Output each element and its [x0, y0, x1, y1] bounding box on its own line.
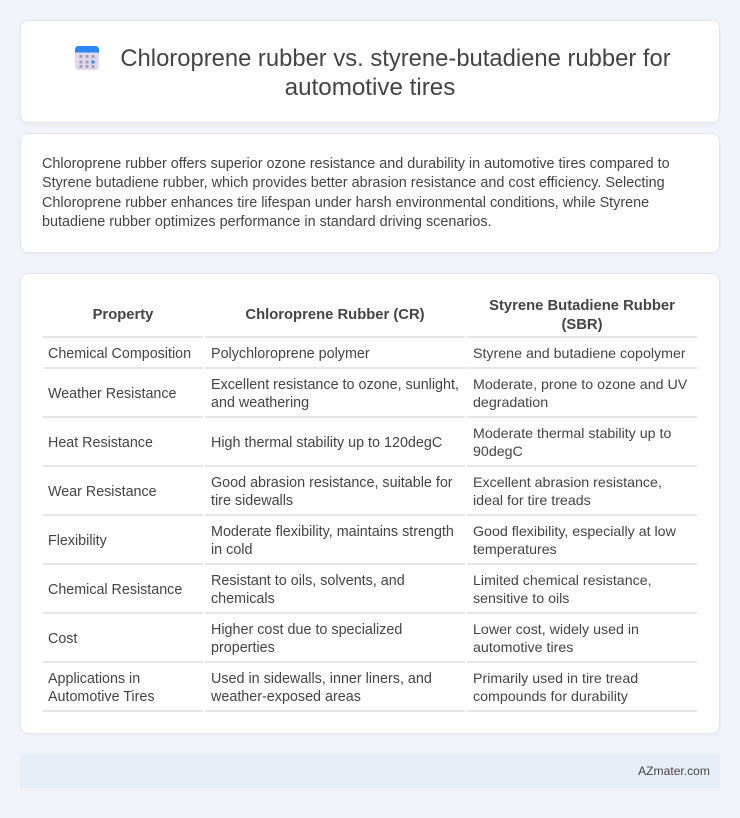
row: wear resistance: tire sidewalls [211, 493, 293, 509]
panel: comparison table [20, 273, 720, 734]
row: cost: Higher cost due to specialized [211, 622, 402, 638]
row: weather resistance: and weathering [211, 395, 309, 411]
row: cost: Lower cost, widely used in [473, 622, 639, 638]
row: heat resistance: Heat Resistance [48, 435, 153, 451]
row: flexibility: Good flexibility, especially at low [473, 524, 676, 540]
row: chemical composition: Polychloroprene polymer [211, 346, 370, 362]
row: wear resistance: Excellent abrasion resistance, [473, 475, 662, 491]
row: applications: Automotive Tires [48, 689, 154, 705]
row: weather resistance: Moderate, prone to ozone and UV [473, 377, 687, 393]
row: heat resistance: 90degC [473, 444, 523, 460]
summary text: Chloroprene rubber offers superior ozone resistance and durability in automotive tires compared to [42, 156, 670, 172]
row: cost: automotive tires [473, 640, 573, 656]
row: flexibility [48, 524, 676, 558]
panel: title card [20, 20, 720, 123]
footer credit: AZmater.com [638, 764, 710, 778]
title [120, 45, 671, 101]
row: wear resistance: ideal for tire treads [473, 493, 591, 509]
row: wear resistance: Good abrasion resistance, suitable for [211, 475, 453, 491]
row: applications: Primarily used in tire tread [473, 671, 638, 687]
row: cost: Cost [48, 631, 77, 647]
row: flexibility: temperatures [473, 542, 557, 558]
row: weather resistance: degradation [473, 395, 548, 411]
row: chemical composition: Styrene and butadiene copolymer [473, 346, 686, 362]
row: chemical composition: Chemical Composition [48, 346, 191, 362]
summary text: butadiene rubber optimizes performance in standard driving scenarios. [42, 214, 492, 230]
panel: summary [20, 133, 720, 253]
summary text: Chloroprene rubber enhances tire lifespan under harsh environmental conditions, while Styrene [42, 195, 649, 211]
table header: Chloroprene Rubber (CR) [245, 307, 425, 323]
row: chemical resistance: Resistant to oils, solvents, and [211, 573, 405, 589]
table header: (SBR) [561, 317, 603, 333]
row: weather resistance: Weather Resistance [48, 386, 176, 402]
table header: Styrene Butadiene Rubber [489, 298, 675, 314]
row: applications: Applications in [48, 671, 140, 687]
summary text: Styrene butadiene rubber, which provides better abrasion resistance and cost efficiency. Selecting [42, 175, 665, 191]
row: wear resistance [48, 475, 662, 509]
footer bar [20, 754, 720, 788]
row: flexibility: in cold [211, 542, 252, 558]
row: heat resistance: High thermal stability up to 120degC [211, 435, 442, 451]
summary text [42, 156, 670, 230]
row: weather resistance [48, 377, 688, 411]
row: cost [48, 622, 639, 656]
row: chemical composition [48, 346, 686, 362]
row: applications: weather-exposed areas [211, 689, 361, 705]
table header [93, 298, 675, 333]
row: chemical resistance [48, 573, 652, 607]
title: automotive tires [285, 74, 455, 101]
row: heat resistance: Moderate thermal stability up to [473, 426, 671, 442]
table header: Property [93, 307, 153, 323]
row: wear resistance: Wear Resistance [48, 484, 157, 500]
row: heat resistance [48, 426, 671, 460]
row: chemical resistance: sensitive to oils [473, 591, 569, 607]
row: weather resistance: Excellent resistance to ozone, sunlight, [211, 377, 459, 393]
row: chemical resistance: chemicals [211, 591, 275, 607]
row: chemical resistance: Chemical Resistance [48, 582, 182, 598]
icon: calendar [75, 46, 99, 70]
row: flexibility: Moderate flexibility, maintains strength [211, 524, 454, 540]
title: Chloroprene rubber vs. styrene-butadiene rubber for [120, 45, 671, 72]
row: applications [48, 671, 638, 705]
row: cost: properties [211, 640, 275, 656]
row: flexibility: Flexibility [48, 533, 107, 549]
row: applications: compounds for durability [473, 689, 628, 705]
row: chemical resistance: Limited chemical resistance, [473, 573, 652, 589]
row: applications: Used in sidewalls, inner liners, and [211, 671, 432, 687]
